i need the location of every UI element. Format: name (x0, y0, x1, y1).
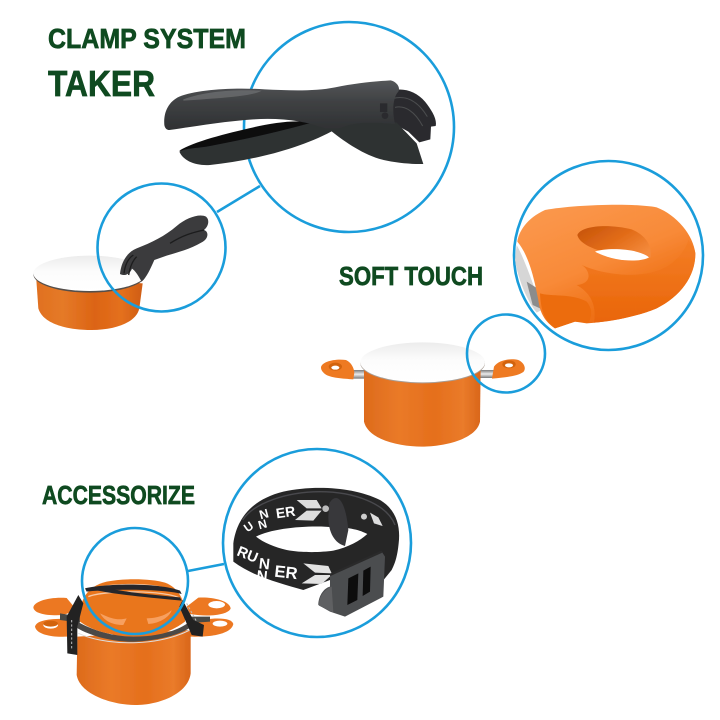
pivot rivet (382, 112, 388, 119)
twisted inner band (328, 498, 348, 546)
finger hole recess (577, 226, 651, 260)
coiled strap with buckle (233, 488, 399, 617)
coiled strap with buckle: U (241, 519, 256, 535)
jaw hooks (392, 90, 436, 142)
magnifier: pot lid circle (82, 528, 188, 634)
coiled strap with buckle: RU (234, 544, 260, 567)
handle body (517, 205, 695, 328)
left lower handle (35, 619, 77, 637)
right handle (492, 359, 525, 379)
magnifier: saucepan detail circle (98, 184, 226, 312)
stacked pot with strap (33, 579, 233, 705)
heading: clamp system: CLAMP SYSTEM (48, 23, 246, 54)
pot rim (360, 343, 485, 383)
right upper handle (187, 597, 231, 615)
stock pot with soft touch handles (321, 342, 525, 447)
left upper handle (33, 598, 77, 615)
see-through hole (595, 249, 649, 261)
coiled strap with buckle: N (256, 568, 268, 586)
strap lettering: ER (275, 503, 296, 521)
connector line: accessorize (188, 564, 224, 571)
clamp bars (60, 613, 210, 623)
heading: soft touch: SOFT TOUCH (339, 261, 483, 291)
coiled strap with buckle: ER (274, 562, 299, 583)
strap print (72, 603, 197, 650)
coiled strap with buckle: N (258, 555, 271, 573)
mini taker on saucepan (120, 215, 208, 282)
pot body (364, 367, 481, 447)
lower arm inner (179, 121, 313, 157)
heading: accessorize: ACCESSORIZE (42, 482, 195, 510)
strap chevrons (295, 500, 322, 521)
steel connectors (352, 370, 367, 379)
left handle (321, 360, 354, 379)
magnifier: strap circle (223, 449, 411, 637)
upper arm (164, 80, 399, 131)
steel stem (515, 245, 542, 313)
arm highlight (183, 90, 262, 101)
lower shaded fold (577, 240, 695, 323)
heading: taker: TAKER (48, 63, 155, 104)
strap loop (233, 488, 399, 597)
lower arm and jaw (179, 117, 423, 165)
connector line: taker (217, 186, 260, 212)
magnifier: taker circle (244, 22, 454, 232)
inner opening (256, 526, 367, 552)
coiled strap with buckle: N (256, 516, 268, 532)
saucepan with orange body (33, 256, 146, 330)
coiled strap with buckle: N (258, 506, 270, 522)
lid (80, 579, 185, 636)
magnifier: soft touch handle circle (514, 161, 703, 350)
large clamp taker (164, 80, 436, 165)
steel rim and clamp ring (75, 622, 192, 642)
magnifier: soft touch pot circle (467, 314, 545, 392)
right lower handle (190, 618, 233, 637)
buckle (318, 552, 385, 617)
body (77, 630, 191, 705)
strap (85, 585, 182, 594)
enlarged soft touch handle (515, 205, 695, 328)
strap edges (243, 492, 395, 525)
